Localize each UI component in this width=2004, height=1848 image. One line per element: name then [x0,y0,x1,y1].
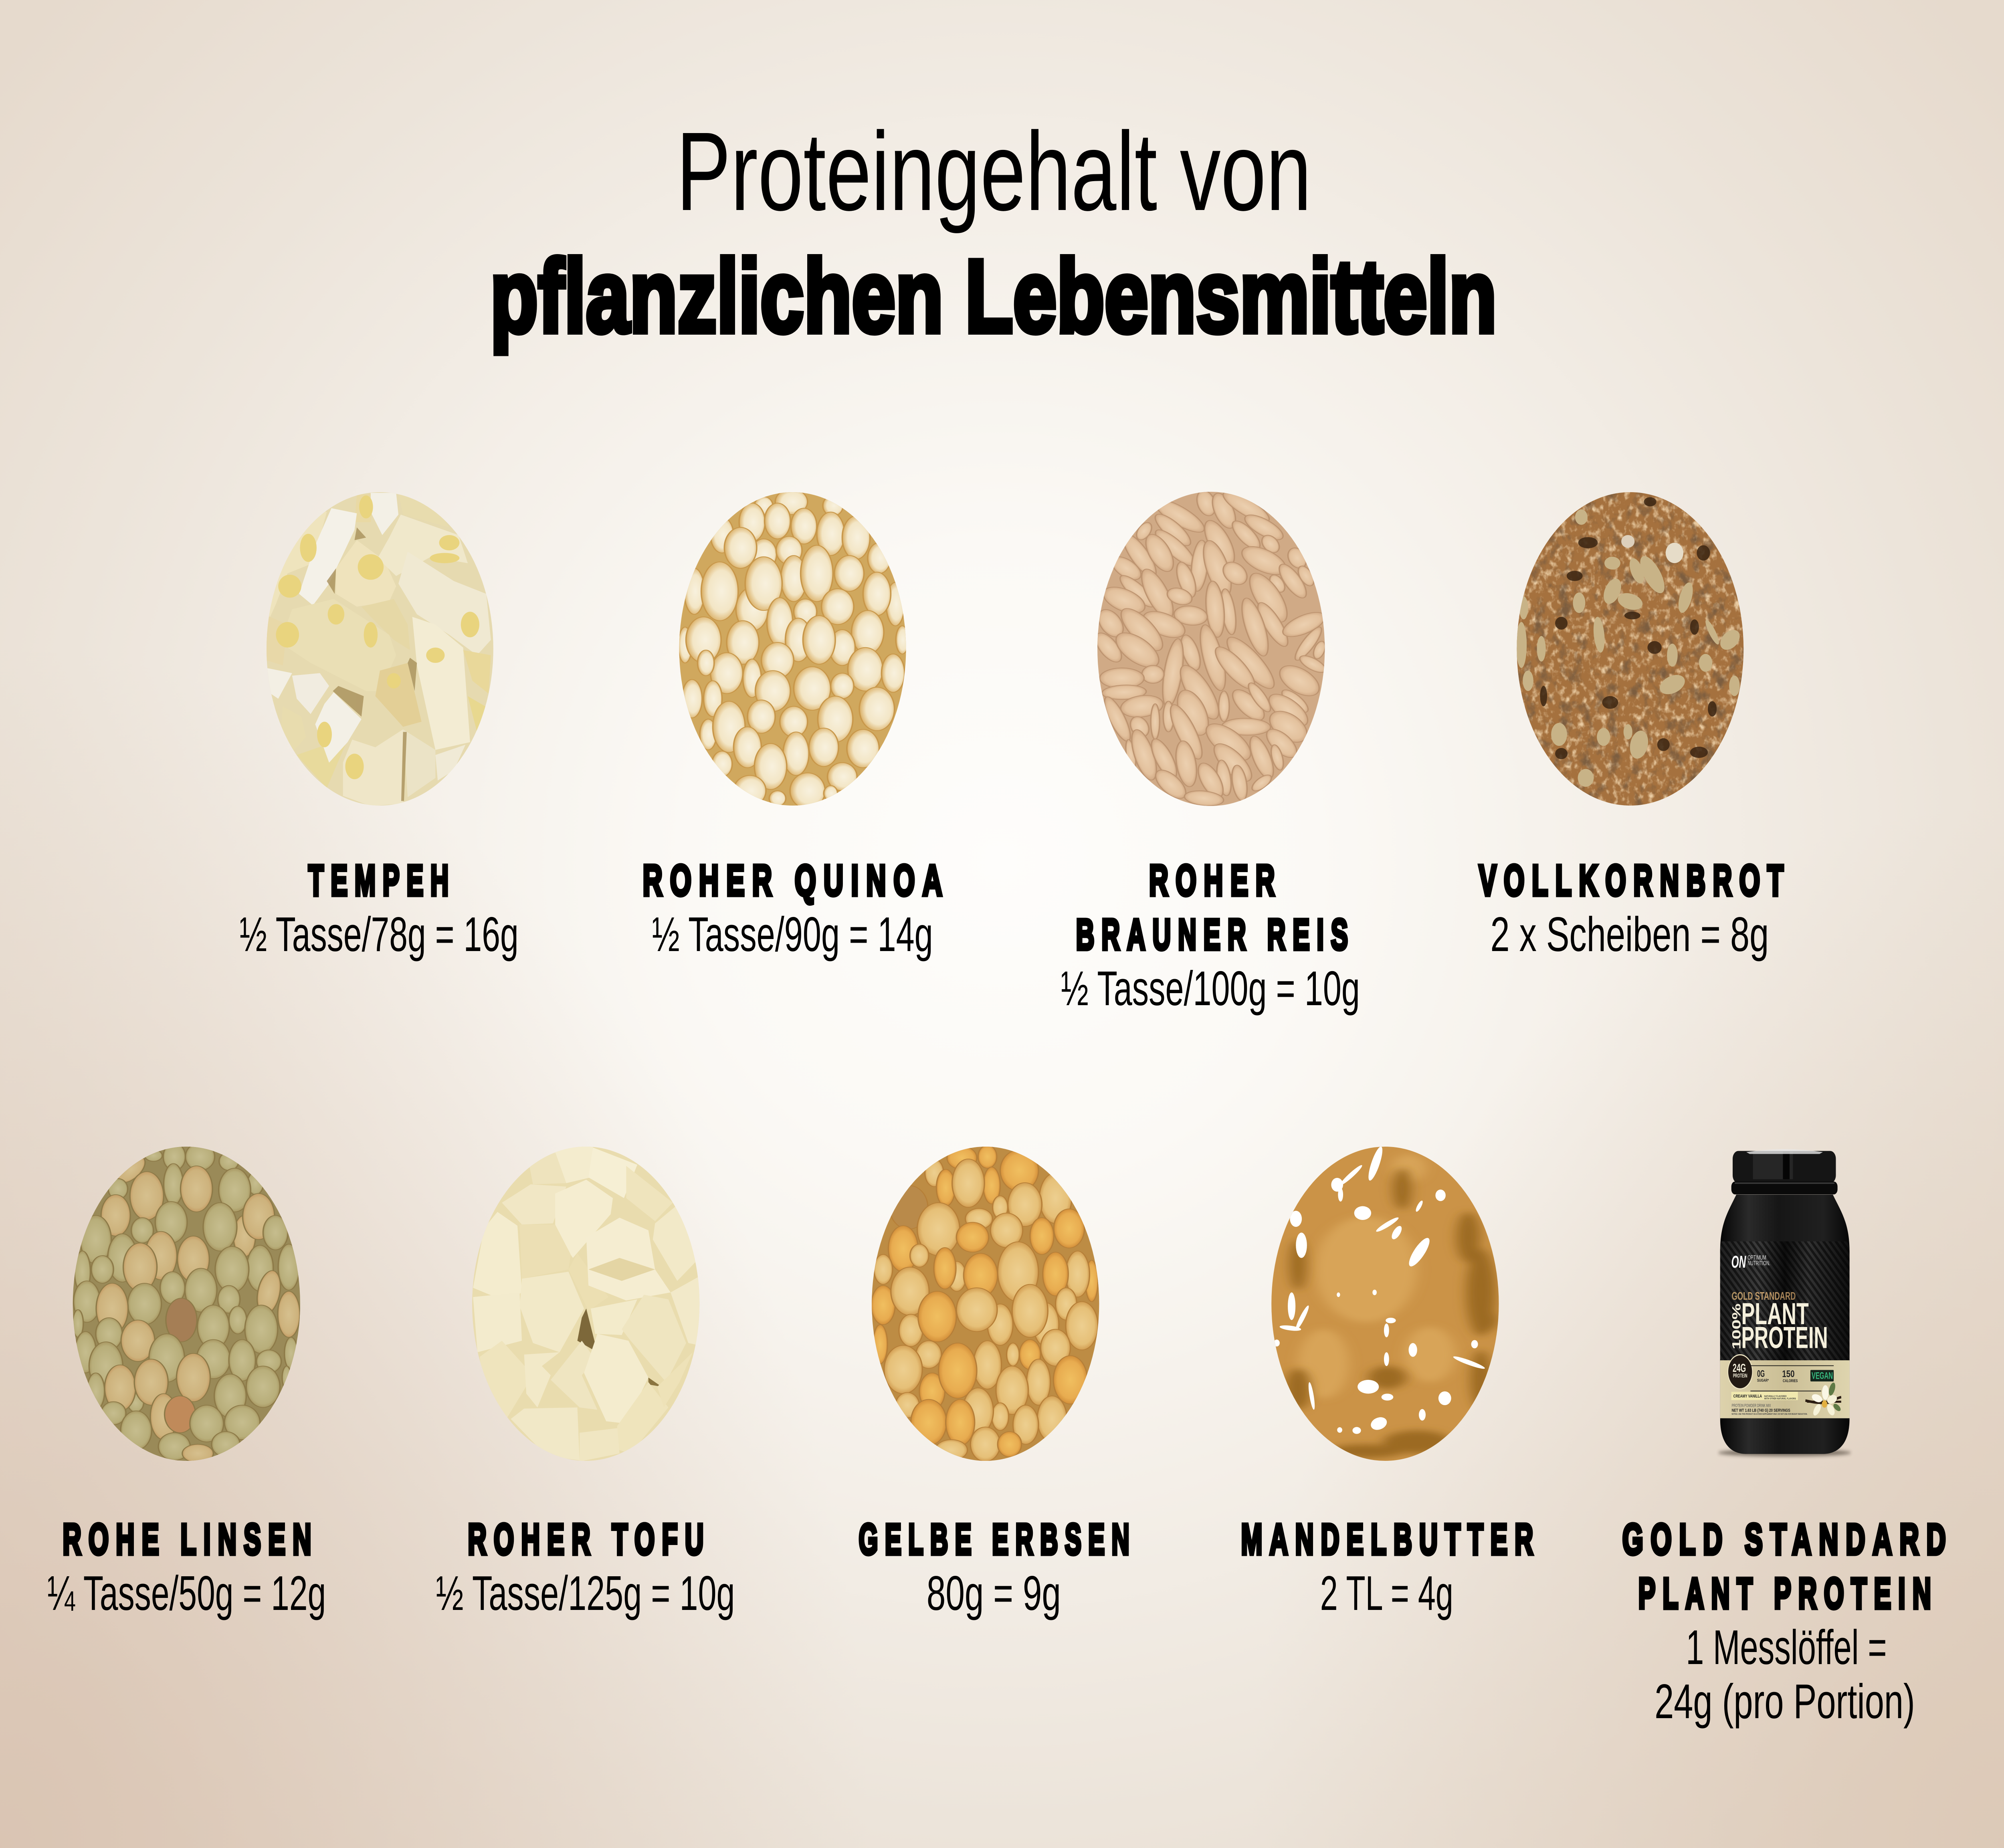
jar flavor strip: CREAMY VANILLA [1733,1394,1762,1399]
jar flavor strip: NET WT 1.63 LB (740 G) 20 SERVINGS [1731,1408,1790,1413]
jar flavor strip: NATURALLY FLAVORED [1764,1395,1787,1398]
panel: whole grain bread [1479,487,1791,961]
panel: tempeh [240,485,519,961]
serving: 1 Messlöffel = [1686,1620,1887,1674]
jar product title [1729,1290,1828,1355]
panel: tofu [436,1142,735,1620]
jar flavor strip: PROTEIN POWDER DRINK MIX [1731,1403,1771,1408]
panel: yellow peas [859,1142,1136,1620]
serving: 80g = 9g [927,1566,1061,1620]
jar nutrition facts: SUGAR* [1757,1378,1769,1383]
jar protein badge [1728,1355,1752,1389]
jar flavor strip: WITH OTHER NATURAL FLAVORS [1764,1398,1796,1400]
name: ROHER TOFU [468,1515,711,1564]
serving: ½ Tasse/125g = 10g [436,1566,735,1620]
jar nutrition facts: VEGAN [1812,1371,1833,1381]
title [490,109,1497,354]
name: ROHE LINSEN [63,1515,319,1564]
jar protein badge: 24G [1733,1362,1746,1375]
panel: brown rice [1061,485,1360,1016]
name: ROHER [1149,856,1282,905]
jar logo: NUTRITION. [1747,1260,1770,1266]
jar flavor strip: NOTICE: USE THIS PRODUCT AS A FOOD SUPPLEMENT ONLY. DO NOT USE FOR WEIGHT REDUCTION. [1731,1413,1807,1415]
serving: 24g (pro Portion) [1655,1674,1915,1729]
jar product title: PROTEIN [1741,1321,1828,1355]
icon: tofu photo [470,1142,705,1467]
jar flavor strip [1731,1392,1807,1415]
name: TEMPEH [308,856,456,905]
icon: yellow peas photo [869,1142,1103,1467]
jar nutrition facts: 150 [1782,1369,1794,1379]
serving: ½ Tasse/100g = 10g [1061,961,1360,1016]
name: GELBE ERBSEN [859,1515,1136,1564]
icon: quinoa photo [676,485,911,814]
serving: 2 x Scheiben = 8g [1491,907,1769,961]
panel: gold standard plant protein [1622,1149,1953,1729]
title line 2: pflanzlichen Lebensmitteln [490,238,1497,354]
serving: 2 TL = 4g [1320,1566,1453,1620]
name: ROHER QUINOA [642,856,950,905]
name [1076,856,1355,959]
name: GOLD STANDARD [1622,1515,1953,1564]
serving [1655,1620,1915,1729]
jar product title: 100% [1729,1303,1743,1349]
icon: protein powder jar [1718,1149,1851,1456]
name: MANDELBUTTER [1241,1515,1540,1564]
name: BRAUNER REIS [1076,911,1355,959]
icon: lentils photo [70,1142,305,1467]
jar logo [1731,1252,1770,1271]
jar logo: ON [1731,1252,1746,1271]
icon: bread photo [1514,487,1746,812]
jar nutrition facts [1750,1365,1834,1392]
jar logo: OPTIMUM [1747,1254,1766,1261]
jar nutrition facts: 0G [1757,1369,1765,1379]
jar vanilla flower [1805,1381,1842,1418]
jar nutrition facts: CALORIES [1783,1378,1798,1383]
panel: quinoa [642,485,950,961]
icon: almond butter photo [1269,1142,1504,1467]
jar product title: PLANT [1741,1297,1809,1331]
serving: ½ Tasse/90g = 14g [652,907,933,961]
icon: tempeh photo [261,485,499,814]
name [1622,1515,1953,1618]
name: VOLLKORNBROT [1479,856,1791,905]
serving: ½ Tasse/78g = 16g [240,907,519,961]
panel: lentils [47,1142,326,1620]
name: PLANT PROTEIN [1638,1569,1938,1618]
title line 1: Proteingehalt von [676,109,1311,234]
serving: ¼ Tasse/50g = 12g [47,1566,326,1620]
jar product title: GOLD STANDARD [1731,1290,1796,1303]
icon: rice photo [1090,485,1332,814]
jar protein badge: PROTEIN [1733,1373,1747,1379]
panel: almond butter [1241,1142,1540,1620]
